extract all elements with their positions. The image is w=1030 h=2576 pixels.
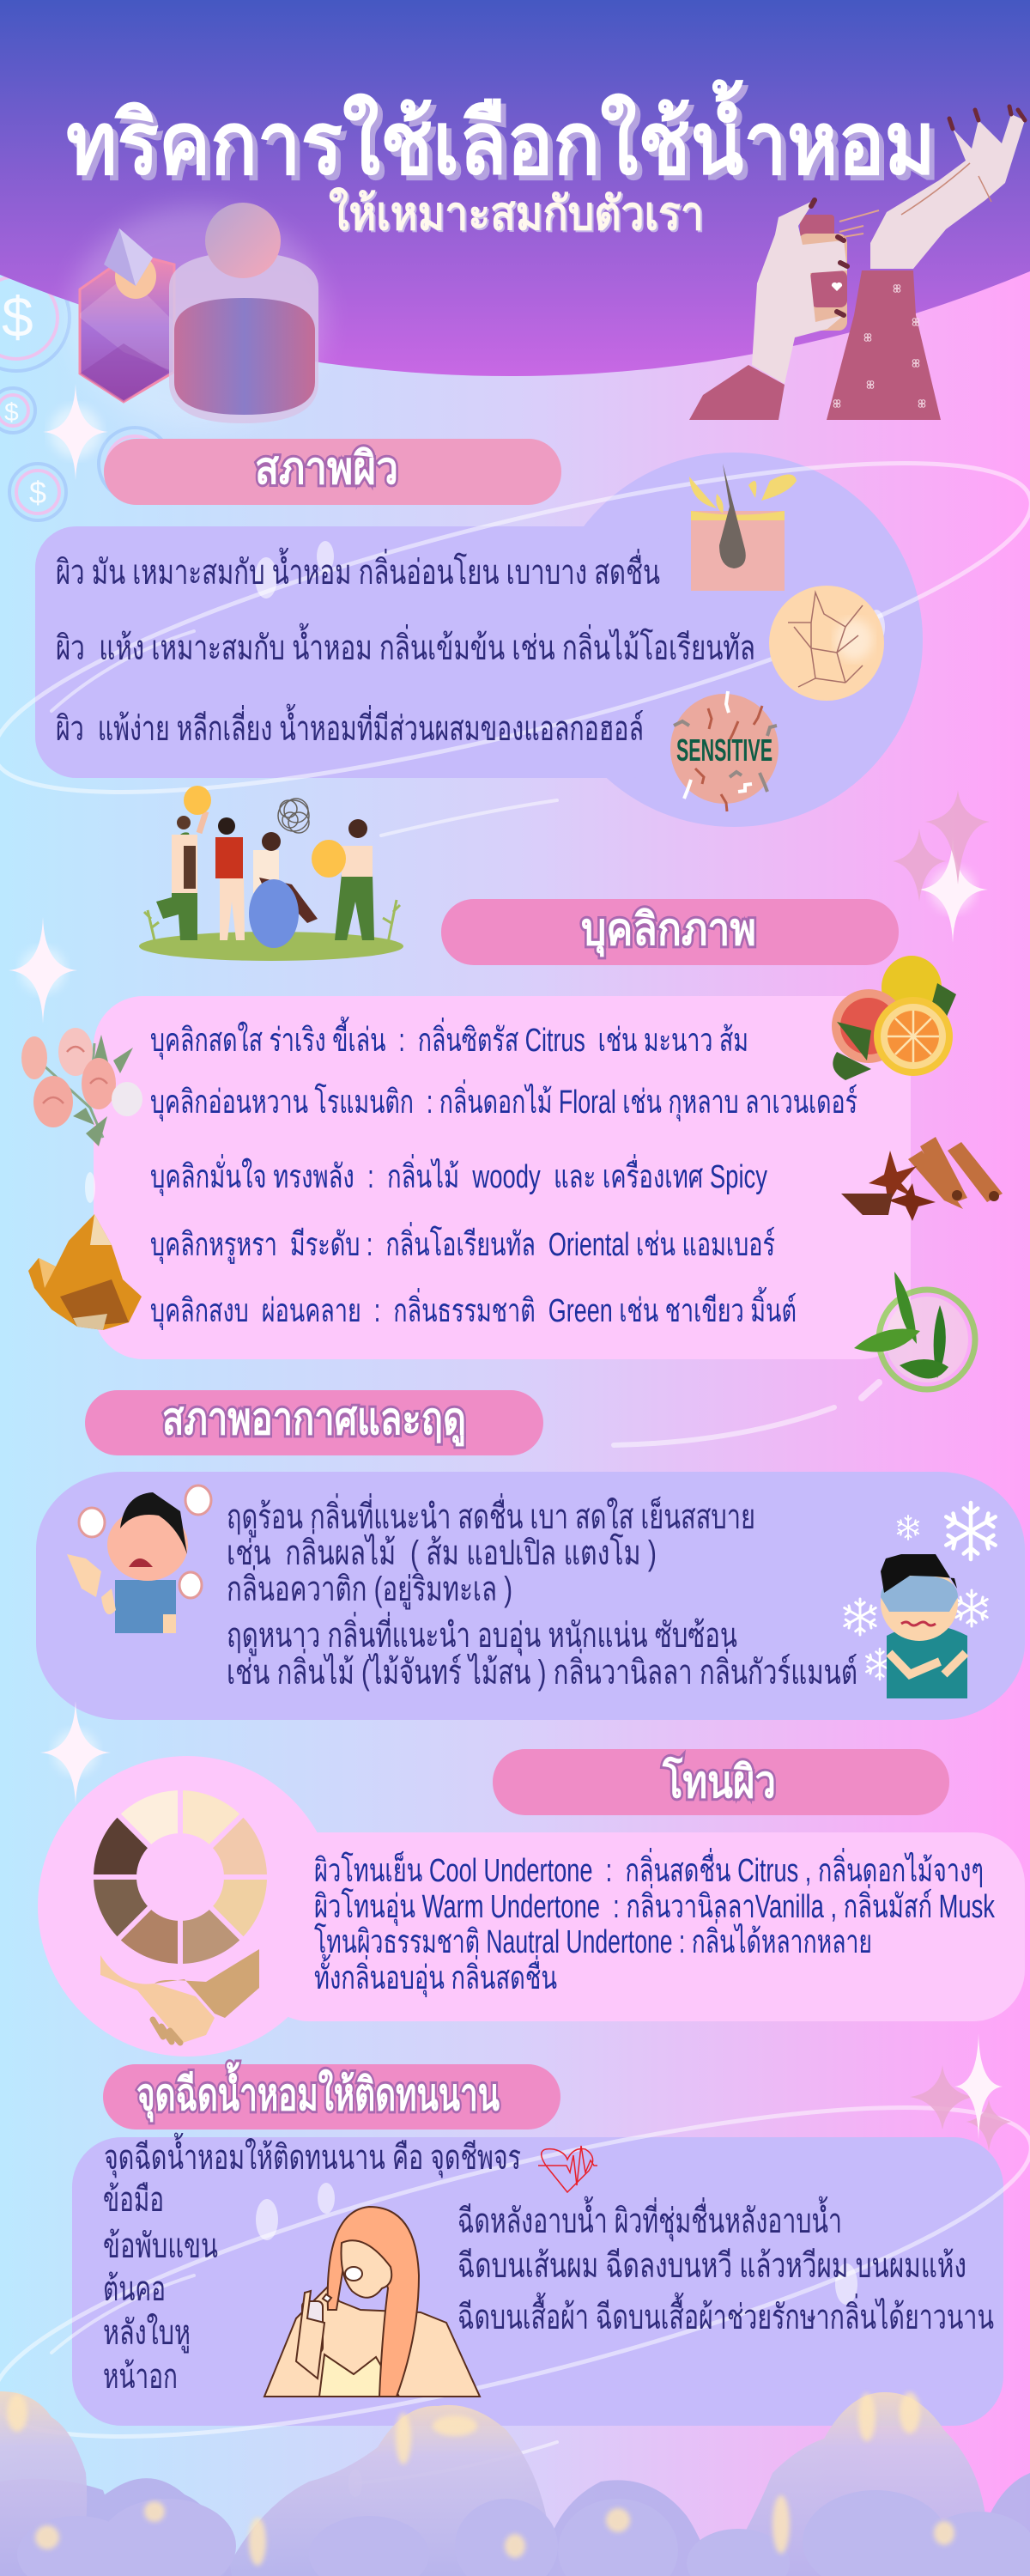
text: personality xyxy=(150,1016,857,1330)
heading: skin condition xyxy=(104,439,561,505)
text: skin tone: ทั้งกลิ่นอบอุ่น กลิ่นสดชื่น xyxy=(314,1953,557,1997)
crystal box xyxy=(80,253,174,402)
sensitive label: SENSITIVE xyxy=(676,732,772,768)
icon: rose flowers xyxy=(21,1028,142,1146)
heading: weather and season xyxy=(85,1390,543,1455)
decorative dollar coins: $ xyxy=(2,285,33,349)
chart: skin tone wheel xyxy=(91,1788,270,1966)
text: weather and season: ฤดูร้อน กลิ่นที่แนะนำ สดชื่น เบา สดใส เย็นสสบาย xyxy=(227,1493,755,1537)
text: personality: บุคลิกหรูหรา มีระดับ : กลิ่นโอเรียนทัล Oriental เช่น แอมเบอร์ xyxy=(150,1222,775,1264)
icon: handshake xyxy=(100,1949,259,2043)
text: pulse point list: ข้อมือ xyxy=(103,2181,164,2219)
sparkles xyxy=(9,384,1011,2151)
icon: dry cracked skin xyxy=(769,586,884,701)
icon: spices xyxy=(841,1137,1003,1221)
decorative dollar coins xyxy=(0,264,171,520)
title: ทริคการใช้เลือกใช้น้ำหอม xyxy=(66,79,936,192)
text: personality: บุคลิกมั่นใจ ทรงพลัง : กลิ่นไม้ woody และ เครื่องเทศ Spicy xyxy=(150,1154,767,1196)
text: weather and season: กลิ่นอควาติก (อยู่ริมทะเล ) xyxy=(227,1565,512,1609)
scribble thought xyxy=(278,799,309,833)
face xyxy=(342,2240,391,2298)
text: spray tips xyxy=(457,2196,994,2336)
crystal pyramid xyxy=(104,228,153,286)
text: skin condition xyxy=(56,547,755,748)
long hair xyxy=(328,2207,419,2397)
holding hand xyxy=(752,200,847,384)
woman with smiley xyxy=(156,786,211,940)
icon: sweating man in hot weather xyxy=(67,1485,211,1633)
text: pulse point list: หลังใบหู xyxy=(103,2312,191,2353)
panel: pulse points background xyxy=(72,2137,1003,2426)
heading: skin tone: โทนผิว xyxy=(662,1755,776,1807)
illustration: people with moods xyxy=(139,786,403,961)
text: pulse point list: ต้นคอ xyxy=(103,2270,166,2308)
spray lines xyxy=(839,210,879,237)
illustration: woman spraying perfume xyxy=(264,2207,480,2397)
heading: personality: บุคลิกภาพ xyxy=(581,905,756,957)
panel: weather background xyxy=(36,1472,1025,1720)
text: skin tone xyxy=(314,1848,996,1997)
clouds xyxy=(0,2391,1030,2576)
title: ทริคการใช้เลือกใช้น้ำหอม xyxy=(71,84,941,197)
heading: weather and season: สภาพอากาศและฤดู xyxy=(162,1394,466,1447)
jar xyxy=(169,252,318,423)
icon: green tea leaves xyxy=(854,1272,975,1389)
text: weather and season xyxy=(227,1493,857,1692)
icon: oily skin follicle xyxy=(689,464,797,591)
decorative glow beads xyxy=(85,541,885,2497)
woman with smiley right xyxy=(312,819,374,940)
text: pulse point intro: จุดฉีดน้ำหอมให้ติดทนนาน คือ จุดชีพจร xyxy=(104,2132,521,2178)
header band xyxy=(0,0,1030,376)
panel: personality background xyxy=(94,996,911,1359)
sad blue blob xyxy=(249,879,299,948)
dress xyxy=(319,2354,399,2397)
text: spray tips: ฉีดหลังอาบน้ำ ผิวที่ชุ่มชื่นหลังอาบน้ำ xyxy=(457,2196,842,2242)
text: personality: บุคลิกสดใส ร่าเริง ขี้เล่น : กลิ่นซิตรัส Citrus เช่น มะนาว ส้ม xyxy=(150,1016,748,1060)
icon: citrus fruit xyxy=(832,956,956,1080)
sphere xyxy=(205,203,281,278)
raised hand xyxy=(870,114,1025,269)
text: pulse point list: ข้อพับแขน xyxy=(103,2227,218,2265)
icon: freezing man with snowflakes xyxy=(845,1503,996,1698)
text: weather and season: ฤดูหนาว กลิ่นที่แนะนำ อบอุ่น หนักแน่น ซับซ้อน xyxy=(227,1612,737,1656)
text: weather and season: เช่น กลิ่นผลไม้ ( ส้ม แอปเปิล แตงโม ) xyxy=(227,1529,657,1572)
heading: personality xyxy=(441,899,899,965)
text: skin condition: ผิว แพ้ง่าย หลีกเลี่ยง น้ำหอมที่มีส่วนผสมของแอลกอฮอล์ xyxy=(56,703,644,748)
heading: skin condition: สภาพผิว xyxy=(255,444,398,494)
heading: long-lasting spray points: จุดฉีดน้ำหอมให้ติดทนนาน xyxy=(136,2062,500,2123)
man in red shirt xyxy=(215,817,245,940)
shoulders and chest xyxy=(264,2284,480,2397)
steam puffs xyxy=(79,1485,211,1598)
icon: amber crystal xyxy=(28,1214,142,1330)
icon: sensitive skin xyxy=(670,691,779,811)
decorative dollar coins: $ xyxy=(4,398,19,427)
panel: skin condition background xyxy=(35,453,923,827)
heading: skin tone xyxy=(493,1749,949,1815)
heading: long-lasting spray points xyxy=(103,2062,560,2129)
sitting woman xyxy=(253,832,318,923)
right sleeve xyxy=(827,270,941,420)
icon: heart pulse xyxy=(538,2146,597,2192)
text: pulse point list xyxy=(103,2181,218,2396)
subtitle: ให้เหมาะสมกับตัวเรา xyxy=(330,188,706,241)
text: skin condition: ผิว แห้ง เหมาะสมกับ น้ำหอม กลิ่นเข้มข้น เช่น กลิ่นไม้โอเรียนทัล xyxy=(56,623,755,667)
subtitle: ให้เหมาะสมกับตัวเรา xyxy=(329,186,704,240)
text: pulse point list: หน้าอก xyxy=(103,2358,178,2396)
left sleeve xyxy=(689,365,785,420)
decorative dollar coins: $ xyxy=(29,475,46,510)
bottle and hand xyxy=(302,2301,323,2353)
perfume bottle xyxy=(800,215,834,237)
text: skin condition: ผิว มัน เหมาะสมกับ น้ำหอม กลิ่นอ่อนโยน เบาบาง สดชื่น xyxy=(56,547,660,592)
illustration: crystal and jar xyxy=(69,203,326,429)
panel: skin tone background xyxy=(38,1756,1025,2057)
illustration: hands spraying perfume xyxy=(689,106,1025,420)
